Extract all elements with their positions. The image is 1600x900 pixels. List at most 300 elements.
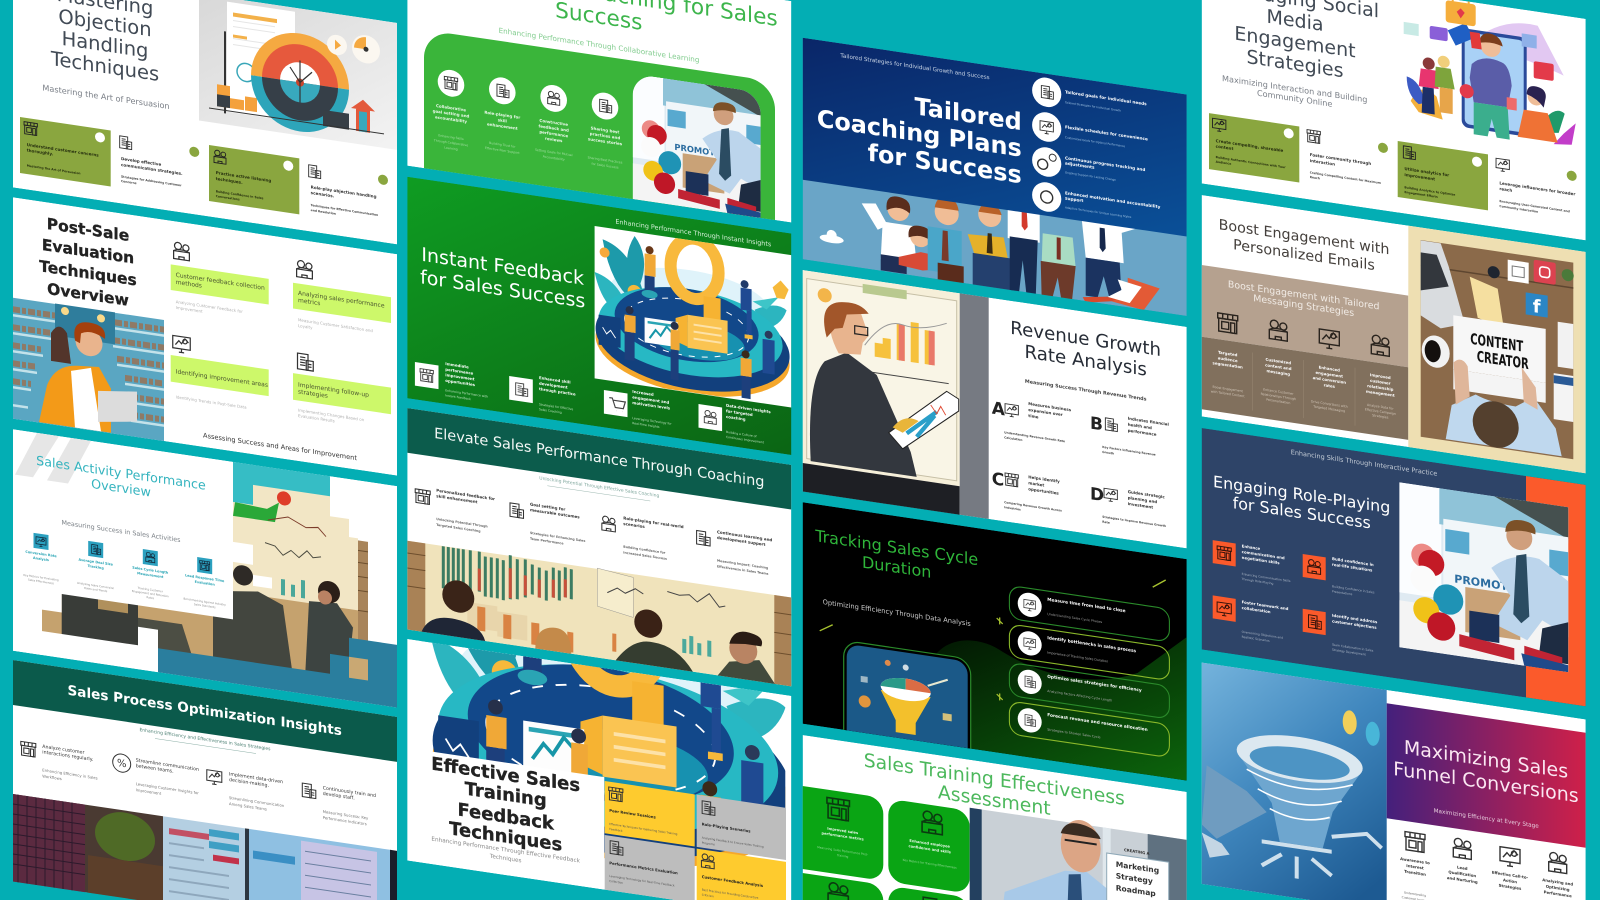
item 4: Measuring Impact: Coaching — [717, 559, 769, 570]
card 2: communication strategies. — [121, 162, 183, 176]
item D: Strategies to Improve Revenue Growth — [1102, 515, 1166, 528]
benefit 4 — [698, 399, 771, 446]
sign: marketing strategy roadmap: Marketing — [1116, 860, 1159, 875]
metric 4: Benchmarking Against Industry — [184, 597, 226, 607]
item 2 — [1303, 552, 1375, 600]
panel: Sales Training Effectiveness Assessment — [783, 732, 1187, 900]
benefit 2 — [509, 371, 576, 417]
card 4: Role-play objection handling — [311, 184, 377, 199]
benefit 1: performance — [445, 367, 474, 376]
title: Tailored — [915, 92, 1022, 136]
item D: Rate — [1102, 520, 1110, 525]
item C: opportunities — [1028, 486, 1059, 496]
panel: Engaging Role-Playing for Sales Success — [1202, 428, 1586, 706]
metric 4: Sales Standards — [194, 602, 216, 609]
item 2 — [112, 754, 199, 795]
illustration: funnel panel — [844, 640, 971, 769]
benefit 2: Enhanced skill — [539, 375, 571, 385]
panel: Sales Activity Performance Overview — [13, 429, 397, 708]
card 2: Reach — [1310, 175, 1320, 180]
stage 3 — [1492, 845, 1529, 892]
step 4 — [588, 90, 623, 170]
tan band — [1202, 265, 1408, 367]
footer caption: Assessing Success and Areas for Improvement — [203, 431, 357, 462]
column 1: with Tailored Content — [1211, 389, 1245, 398]
metric 2: Average Deal Size — [78, 558, 114, 567]
step 3 — [1009, 662, 1169, 719]
panel: Mastering Objection Handling Techniques — [13, 0, 397, 244]
photo: promo event — [1399, 482, 1568, 672]
title: Tracking Sales Cycle — [814, 526, 978, 569]
card 4 — [308, 164, 388, 216]
brown band — [1202, 337, 1408, 440]
step 1: Enhancing Skills — [438, 133, 464, 141]
subtitle: Enhancing Efficiency and Effectiveness in Sales Strategies — [139, 727, 271, 752]
title: Sales Activity Performance — [36, 454, 206, 494]
panel: Peer Coaching for Sales Success — [407, 0, 791, 241]
item 4: develop staff. — [323, 791, 355, 802]
item A: time — [1028, 413, 1039, 420]
item 1: Unlocking Potential Through — [436, 517, 488, 529]
benefit 3: Leveraging Technology for — [632, 416, 672, 426]
icon: facebook — [1526, 292, 1548, 319]
title: Rate Analysis — [1025, 342, 1147, 381]
panel: Effective Sales Training Feedback Techniques — [407, 544, 791, 900]
photo: promo event — [633, 74, 761, 218]
card 4: and Resolution — [311, 208, 336, 216]
card 3: Building Confidence in Sales — [216, 189, 264, 200]
column 1: segmentation — [1213, 360, 1243, 370]
card 2: Foster community through — [1310, 152, 1371, 166]
item B: performance — [1128, 428, 1157, 437]
band heading: Boost Engagement with Tailored — [1228, 279, 1379, 312]
item 4: strategies — [298, 389, 328, 400]
item B: Indicates financial — [1128, 416, 1169, 427]
card: Peer Review Sessions: Feedback — [609, 827, 623, 833]
item 4 — [293, 352, 391, 422]
benefit 1: improvement — [445, 372, 475, 382]
step 1 — [433, 67, 470, 153]
step 2: Effective Peer Support — [485, 146, 520, 155]
metric 3: Measurement — [137, 571, 164, 579]
benefit 4: Data-driven insights — [726, 403, 771, 414]
item 2: Presentations — [1332, 589, 1353, 596]
benefit 3: Real-Time Insights — [632, 421, 660, 429]
step 2: Importance of Tracking Sales Duration — [1047, 651, 1108, 664]
item 3: decision-making. — [229, 777, 269, 789]
title: Instant Feedback — [421, 243, 584, 290]
metric 3 — [132, 547, 169, 602]
panel: Tracking Sales Cycle Duration — [803, 502, 1187, 801]
icon: cloud — [820, 228, 844, 245]
card 2: Strategies for Addressing Customer — [121, 175, 182, 188]
card 1 — [1209, 113, 1299, 182]
step 1: accountability — [435, 114, 467, 124]
item 1: Workflows — [42, 773, 62, 781]
card 1: Create compelling, shareable — [1216, 138, 1284, 153]
card: Peer Review Sessions: Peer Review Sessions — [609, 808, 656, 820]
card: Customer Feedback Analysis: Best Practices for Providing Constructive — [702, 888, 759, 900]
item D: planning and — [1128, 495, 1157, 504]
title: Evaluation — [42, 236, 134, 268]
illustration: social media phone team — [1404, 0, 1576, 149]
card 3 — [1398, 141, 1488, 210]
item 1: Through Role-Playing — [1241, 577, 1273, 586]
title: Handling — [62, 27, 148, 63]
benefit 4: Adaptive Techniques for Unique Learning Styles — [1065, 205, 1132, 219]
metric 3: Engagement and Retention — [132, 589, 169, 598]
card 3 — [783, 870, 883, 900]
item 2 — [510, 499, 585, 549]
item 1: Enhance — [1242, 543, 1261, 551]
step 2: Role-playing for — [484, 110, 520, 120]
column 3: and conversion — [1313, 375, 1346, 385]
card 2: Develop effective — [121, 156, 161, 167]
card 1: Mastering the Art of Persuasion — [27, 164, 81, 175]
item 4: Evaluation Results — [298, 413, 335, 423]
benefit 4: for targeted — [726, 408, 753, 417]
title: Overview — [47, 280, 129, 310]
title: Personalized Emails — [1233, 237, 1375, 274]
column 2: Enhance Customer — [1263, 388, 1294, 396]
panel: Sales Process Optimization Insights — [13, 660, 397, 900]
card 4: Leverage influencers for broader — [1499, 180, 1576, 197]
metric 3: Rates — [147, 595, 155, 600]
metric 2: Analyzing Sales Conversion — [77, 581, 114, 590]
illustration: analyst with chart board — [803, 270, 960, 516]
item C: Helps identify — [1028, 474, 1060, 484]
card 3: techniques. — [216, 176, 243, 185]
column 1: Targeted — [1218, 350, 1238, 358]
card 1: Improved sales — [827, 827, 858, 835]
item 1: Enhancing Efficiency in Sales — [42, 767, 98, 781]
step 3: Accountability — [543, 154, 565, 162]
title: for Sales Success — [1233, 493, 1371, 533]
step 3 — [535, 82, 573, 163]
benefit 4 — [1032, 180, 1161, 228]
title: Maximizing Sales — [1404, 736, 1568, 783]
subtitle: Enhancing Performance Through Effective Feedback — [431, 837, 581, 865]
item 2: Analyzing sales performance — [298, 290, 385, 310]
card 1: performance metrics — [822, 831, 864, 842]
white text panel — [407, 639, 604, 890]
benefit 4: Enhanced motivation and accountability — [1065, 190, 1161, 209]
item D — [1090, 483, 1166, 533]
illustration: team of cartoon people — [862, 180, 1140, 314]
photo: content creator desk: CREATOR — [1477, 347, 1529, 373]
column 3: rates — [1324, 382, 1336, 389]
item 4: Team Collaboration in Sales — [1331, 642, 1374, 653]
item 4 — [302, 782, 376, 828]
column 2 — [1261, 318, 1296, 406]
step 4: Forecast revenue and resource allocation — [1047, 712, 1148, 733]
step 3: reviews — [545, 136, 563, 143]
benefit 1: Immediate — [445, 361, 469, 370]
item 4: customer objections — [1332, 618, 1377, 630]
item 4: Measuring Success: Key — [323, 809, 369, 821]
title — [556, 0, 777, 30]
step 3: performance — [539, 129, 568, 138]
metric 2: Rates and Trends — [84, 586, 108, 593]
benefit 2: Sales Coaching — [539, 407, 562, 415]
subtitle: Enhancing Performance Through Instant Insights — [615, 218, 772, 249]
item C: C — [992, 469, 1004, 491]
metric 4: Lead Response Time — [185, 573, 225, 583]
column 4: Effective Campaign — [1365, 407, 1396, 416]
title: Coaching Plans — [817, 105, 1022, 163]
metric 4: Evaluation — [195, 580, 215, 587]
card: Customer Feedback Analysis: Criticism — [702, 893, 714, 898]
metric 2: Tracking — [88, 564, 104, 570]
metric 4 — [184, 555, 226, 611]
subtitle: Optimizing Efficiency Through Data Analysis — [823, 598, 971, 628]
stage 1: Transition — [1404, 869, 1426, 877]
item C: market — [1028, 480, 1044, 488]
step 4: Sharing best — [591, 125, 619, 135]
item 4: Performance Indicators — [323, 815, 367, 826]
metric 3: Tracking Customer — [137, 586, 164, 594]
item B: Growth — [1102, 450, 1114, 456]
item 2: real-life situations — [1332, 562, 1373, 573]
metric 3: Sales Cycle Length — [132, 566, 169, 575]
item 4: development support — [717, 535, 766, 547]
column 4 — [1365, 334, 1396, 421]
benefit 3: engagement and — [632, 394, 670, 405]
card 4 — [888, 886, 970, 900]
item 4: Effectiveness in Sales Teams — [717, 564, 769, 576]
step 4: Sharing Best Practices — [588, 156, 623, 165]
title: Revenue Growth — [1010, 318, 1161, 361]
card 3: improvement — [1404, 172, 1435, 182]
item 2: metrics — [298, 297, 320, 307]
stage 2 — [1447, 837, 1478, 885]
caption: Tailored Strategies for Individual Growth and Success — [839, 53, 990, 81]
column 4: management — [1366, 389, 1395, 398]
benefit 2: Customized Goals for Optimal Performance — [1065, 135, 1125, 148]
item 1 — [415, 485, 495, 535]
item 4: Continuously train and — [323, 785, 376, 799]
subtitle: Community Online — [1257, 88, 1332, 109]
item 3 — [1213, 595, 1289, 646]
benefit 2: Flexible schedules for convenience — [1065, 124, 1148, 142]
card 4: Encouraging User-Generated Content and — [1499, 199, 1570, 213]
benefit 4: coaching — [726, 414, 746, 422]
subtitle: Unlocking Potential Through Effective Sales Coaching — [539, 475, 659, 499]
item 2: % — [117, 758, 126, 770]
title: Sales Process Optimization Insights — [68, 683, 342, 739]
benefit 4: support — [1065, 196, 1083, 203]
card: Role-Playing Scenarios — [697, 795, 786, 860]
column 4: customer — [1370, 378, 1391, 386]
stage 1 — [1400, 831, 1430, 900]
card 2: Crafting Compelling Content for Maximum — [1310, 171, 1381, 185]
stage 2: Lead — [1457, 865, 1468, 871]
stage 4 — [1542, 851, 1573, 899]
stage 1: Awareness to — [1400, 856, 1430, 866]
cream panel — [1408, 226, 1586, 473]
benefit 2 — [1032, 110, 1148, 157]
panel: Post-Sale Evaluation Techniques Overview — [13, 197, 397, 476]
column 4: relationship — [1367, 383, 1394, 392]
item 4: Strategy Development — [1332, 648, 1367, 657]
card 1: content — [1216, 144, 1233, 151]
item 3: Among Sales Teams — [229, 801, 267, 812]
item 2: Strategies for Enhancing Sales — [530, 531, 585, 543]
stage 1: Understanding — [1404, 890, 1426, 898]
item 2: Measuring Customer Satisfaction and — [298, 317, 373, 333]
card: Performance Metrics Evaluation: Performance Metrics Evaluation — [609, 860, 678, 875]
item 4: Identify and address — [1332, 613, 1378, 624]
title: Assessment — [938, 781, 1051, 820]
icon: calendar — [1508, 260, 1529, 284]
photo: man with laptop in store — [13, 297, 164, 441]
subtitle: Measuring Success in Sales Activities — [61, 519, 181, 544]
title: Training — [465, 779, 547, 812]
title: Techniques — [39, 257, 137, 290]
item 2: Building Confidence in Sales — [1332, 584, 1375, 595]
step 1 — [1009, 585, 1169, 642]
benefit 3: Continuous progress tracking and — [1065, 155, 1145, 172]
green content panel — [424, 30, 775, 239]
grey strip — [960, 293, 989, 519]
panel: Boost Engagement with Personalized Emails — [1202, 195, 1586, 473]
stage 3: Effective Call-to- — [1492, 870, 1529, 880]
gradient title band — [1387, 703, 1586, 848]
title: Boost Engagement with — [1219, 217, 1389, 258]
benefit 3 — [1032, 145, 1145, 191]
item 3 — [207, 768, 285, 814]
item 3: scenarios — [623, 521, 645, 529]
column 3 — [1311, 328, 1348, 414]
decorative quote mark — [15, 432, 91, 484]
step 2 — [484, 75, 520, 155]
metric 1: Sales Effectiveness — [28, 578, 55, 585]
column 3: engagement — [1316, 370, 1343, 379]
card: Customer Feedback Analysis: Customer Feedback Analysis — [702, 874, 764, 888]
item 1: interactions regularly. — [42, 749, 93, 763]
card 3: Practice active listening — [216, 170, 271, 183]
item A: expansion over — [1028, 407, 1063, 417]
card 2: interaction — [1310, 158, 1335, 167]
stage 1: Interest — [1406, 863, 1424, 871]
title: Elevate Sales Performance Through Coaching — [434, 425, 764, 491]
step 3: Setting Goals for Mutual — [535, 148, 573, 157]
title: Engagement — [1234, 22, 1356, 63]
title: Objection — [58, 5, 152, 41]
item 4 — [697, 526, 772, 577]
white cut-outs — [13, 429, 233, 655]
column 2: messaging — [1267, 368, 1290, 377]
benefit 4: Continuous Improvement — [726, 435, 765, 445]
title: Overview — [91, 477, 151, 501]
card 1: thoroughly. — [27, 148, 54, 157]
decorative sparks — [820, 529, 1166, 725]
benefit 3: Ongoing Support for Lasting Change — [1065, 170, 1116, 182]
item 3: Implement data-driven — [229, 771, 283, 785]
stage 3: Action — [1503, 877, 1517, 884]
item 3: collaboration — [1242, 605, 1271, 614]
card 1 — [20, 117, 111, 186]
sign: marketing strategy roadmap — [1107, 845, 1169, 900]
stage 4: Analyzing and — [1542, 877, 1573, 887]
metric 2 — [77, 539, 114, 594]
photo: team reviewing charts — [407, 540, 791, 687]
card 4 — [1496, 158, 1577, 219]
item A: Understanding Revenue Growth Rate — [1004, 430, 1065, 443]
card: Performance Metrics Evaluation: Leveraging Technology for Real-Time Feedback — [609, 874, 675, 888]
photo: businessman and roadmap sign — [970, 804, 1187, 900]
card 3: Building Analytics to Optimize — [1404, 185, 1455, 197]
panel: Tailored Coaching Plans for Success — [803, 38, 1187, 321]
sign: marketing strategy roadmap: CREATING A — [1124, 847, 1149, 856]
item D: investment — [1128, 501, 1153, 510]
step 3: feedback and — [539, 123, 569, 133]
icon: instagram — [1534, 260, 1556, 285]
item A: A — [992, 399, 1006, 421]
icon: facebook: f — [1533, 296, 1542, 318]
item 2: Streamline communication — [136, 758, 199, 773]
item B — [1090, 410, 1169, 464]
step 1: Measure time from lead to close — [1047, 597, 1126, 614]
benefit 3: adjustments — [1065, 161, 1095, 170]
benefit 2: through practice — [539, 386, 576, 397]
column 4: Improved — [1370, 372, 1391, 380]
item 3: Role-playing for real-world — [623, 515, 684, 529]
title: Post-Sale — [47, 215, 129, 245]
column 1: audience — [1218, 355, 1238, 363]
title: for Success — [868, 139, 1022, 189]
card 1: Measuring Sales Performance Post- — [817, 845, 868, 857]
item 3: Building Confidence for — [623, 545, 666, 555]
item 2: Leveraging Customer Insights for — [136, 781, 199, 796]
item 4: Continuous learning and — [717, 529, 772, 542]
card: Customer Feedback Analysis — [697, 849, 786, 900]
item A: Measures business — [1028, 401, 1072, 412]
title: Duration — [862, 553, 931, 582]
title: Funnel Conversions — [1393, 757, 1579, 807]
illustration: isometric platform zoomed — [431, 548, 791, 890]
item 1 — [20, 740, 98, 780]
band heading: Messaging Strategies — [1253, 293, 1354, 319]
card 1: Understand customer concerns — [27, 142, 99, 158]
illustration: gauge — [199, 0, 397, 150]
step 3: Optimize sales strategies for efficiency — [1047, 674, 1142, 694]
card: Performance Metrics Evaluation — [605, 835, 695, 900]
card 2 — [888, 799, 970, 894]
item 1 — [1213, 539, 1291, 588]
card 2: Enhanced employee — [909, 839, 951, 849]
blue accent block — [158, 638, 397, 708]
step 2: enhancement — [487, 121, 518, 131]
item C: Comparing Revenue Growth Across — [1004, 500, 1062, 513]
subtitle: Techniques — [489, 854, 522, 864]
navy band — [803, 38, 1187, 237]
step 1: Collaborative — [436, 103, 466, 113]
step 3: Analyzing Factors Affecting Cycle Length — [1047, 689, 1112, 703]
title: Engaging Role-Playing — [1213, 472, 1390, 517]
panel: Elevate Sales Performance Through Coaching — [407, 408, 791, 687]
metric 1 — [23, 531, 59, 586]
metric 1: Analysis — [33, 556, 49, 562]
item 1: Personalized feedback for — [436, 488, 495, 501]
column 3: Enhanced — [1319, 365, 1340, 373]
item D: Guides strategic — [1128, 489, 1165, 500]
item B: Key Factors Influencing Revenue — [1102, 445, 1156, 457]
photo: dashboards — [13, 794, 397, 900]
card 1: Audience — [1216, 160, 1231, 166]
item 2 — [293, 260, 391, 332]
card 2: Concerns — [121, 179, 137, 185]
